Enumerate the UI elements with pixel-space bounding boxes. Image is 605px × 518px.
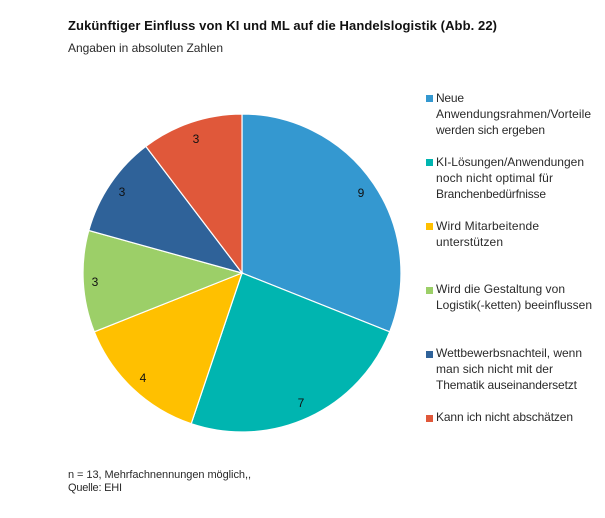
pie value labels: 3: [92, 275, 99, 289]
legend item: Neue Anwendungsrahmen: Neue: [436, 91, 464, 105]
legend item: KI-Lösungen: noch nicht optimal für: [436, 171, 553, 185]
legend item: Wettbewerbsnachteil: man sich nicht mit der: [436, 362, 553, 376]
legend item: Neue Anwendungsrahmen: [426, 91, 591, 137]
legend item: Wettbewerbsnachteil: [426, 346, 582, 392]
pie value labels: 3: [119, 185, 126, 199]
legend item: Wird Mitarbeitende unterstützen: [426, 219, 539, 249]
legend item: Gestaltung von Logistik: [426, 282, 592, 312]
legend item: KI-Lösungen: KI-Lösungen/Anwendungen: [436, 155, 584, 169]
pie value labels: 7: [298, 396, 305, 410]
legend item: Wird Mitarbeitende unterstützen: Wird Mitarbeitende: [436, 219, 539, 233]
legend item: Wird Mitarbeitende unterstützen: unterstützen: [436, 235, 503, 249]
legend item: Wettbewerbsnachteil: Wettbewerbsnachteil, wenn: [436, 346, 582, 360]
pie value labels: 9: [358, 186, 365, 200]
legend item: Gestaltung von Logistik: Logistik(-ketten) beeinflussen: [436, 298, 592, 312]
slice: KI-Lösungen 7: [191, 273, 390, 432]
pie value labels: 4: [140, 371, 147, 385]
slice: Mitarbeitende 4: [94, 273, 242, 424]
source note: n = 13, Mehrfachnennungen möglich,,: [68, 469, 251, 481]
legend item: Neue Anwendungsrahmen: Anwendungsrahmen/Vorteile: [436, 107, 591, 121]
pie value labels: 3: [193, 132, 200, 146]
legend item: KI-Lösungen: Branchenbedürfnisse: [436, 187, 546, 201]
source note: [68, 469, 251, 494]
legend: [426, 91, 592, 424]
slice: Kann ich nicht abschätzen 3: [146, 114, 242, 273]
legend item: KI-Lösungen: [426, 155, 584, 201]
legend item: Neue Anwendungsrahmen: werden sich ergeben: [435, 123, 545, 137]
slice: Neue Anwendungsrahmen 9: [242, 114, 401, 332]
legend item: Gestaltung von Logistik: Wird die Gestaltung von: [436, 282, 565, 296]
legend item: Kann ich nicht abschätzen: Kann ich nicht abschätzen: [436, 410, 573, 424]
slice: Gestaltung 3: [83, 230, 242, 332]
subtitle: Angaben in absoluten Zahlen: [68, 41, 223, 55]
source note: Quelle: EHI: [68, 482, 122, 494]
legend item: Wettbewerbsnachteil: Thematik auseinandersetzt: [436, 378, 578, 392]
slice: Wettbewerbsnachteil 3: [89, 146, 242, 273]
pie chart: [83, 114, 401, 432]
pie value labels: [92, 132, 365, 410]
title: Zukünftiger Einfluss von KI und ML auf die Handelslogistik (Abb. 22): [68, 18, 497, 33]
